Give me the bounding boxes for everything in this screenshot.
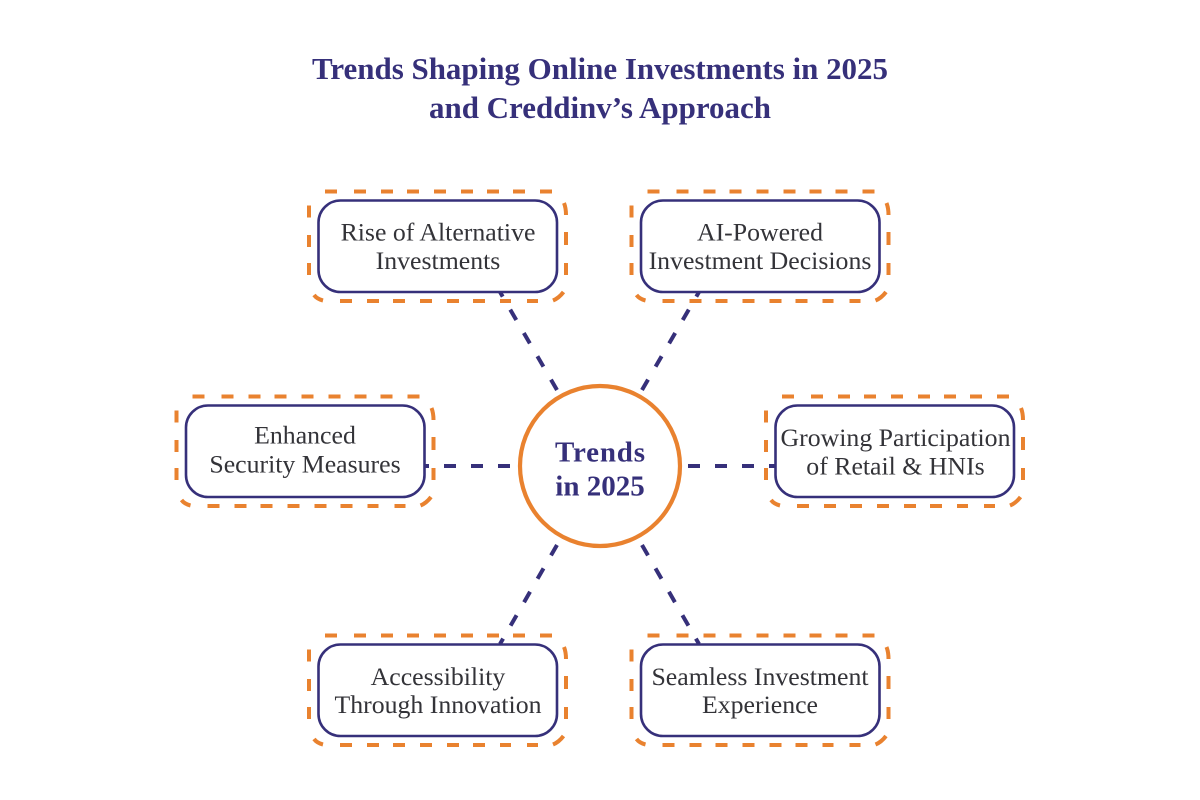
panel: Seamless Investment Experience <box>632 636 888 745</box>
panel: Growing Participation of Retail & HNIs: Growing Participation <box>781 423 1011 452</box>
panel: AI-Powered Investment Decisions: AI-Powered <box>697 218 823 246</box>
central circle: Trends in 2025: Trends <box>555 436 645 468</box>
central circle: Trends in 2025 <box>520 386 680 546</box>
central circle: Trends in 2025: in 2025 <box>555 470 645 502</box>
connector: left <box>424 464 510 468</box>
panel: Enhanced Security Measures: Security Measures <box>209 450 401 478</box>
panel: Accessibility Through Innovation: Through Innovation <box>334 690 542 719</box>
title: Trends Shaping Online Investments in 2025 <box>312 51 888 86</box>
panel: Enhanced Security Measures <box>176 396 434 506</box>
title <box>312 51 888 125</box>
panel: Accessibility Through Innovation: Accessibility <box>371 662 505 691</box>
panel: Rise of Alternative Investments <box>309 192 566 301</box>
panel: AI-Powered Investment Decisions <box>632 192 888 301</box>
connector: top right <box>642 292 699 390</box>
panel: Rise of Alternative Investments: Investments <box>376 246 500 275</box>
connector: bottom left <box>500 545 557 644</box>
panel: Seamless Investment Experience: Experience <box>702 690 818 719</box>
connector: bottom right <box>642 545 699 644</box>
panel: Accessibility Through Innovation <box>309 636 566 745</box>
title: and Creddinv’s Approach <box>429 90 771 125</box>
panel: Rise of Alternative Investments: Rise of Alternative <box>341 218 535 246</box>
panel: Seamless Investment Experience: Seamless Investment <box>651 662 869 691</box>
connector: top left <box>500 292 557 390</box>
panel: Enhanced Security Measures: Enhanced <box>254 420 356 450</box>
connector: right <box>688 464 776 468</box>
panel: Growing Participation of Retail & HNIs: of Retail & HNIs <box>806 452 985 480</box>
panel: Growing Participation of Retail & HNIs <box>766 396 1023 506</box>
panel: AI-Powered Investment Decisions: Investment Decisions <box>649 246 871 275</box>
